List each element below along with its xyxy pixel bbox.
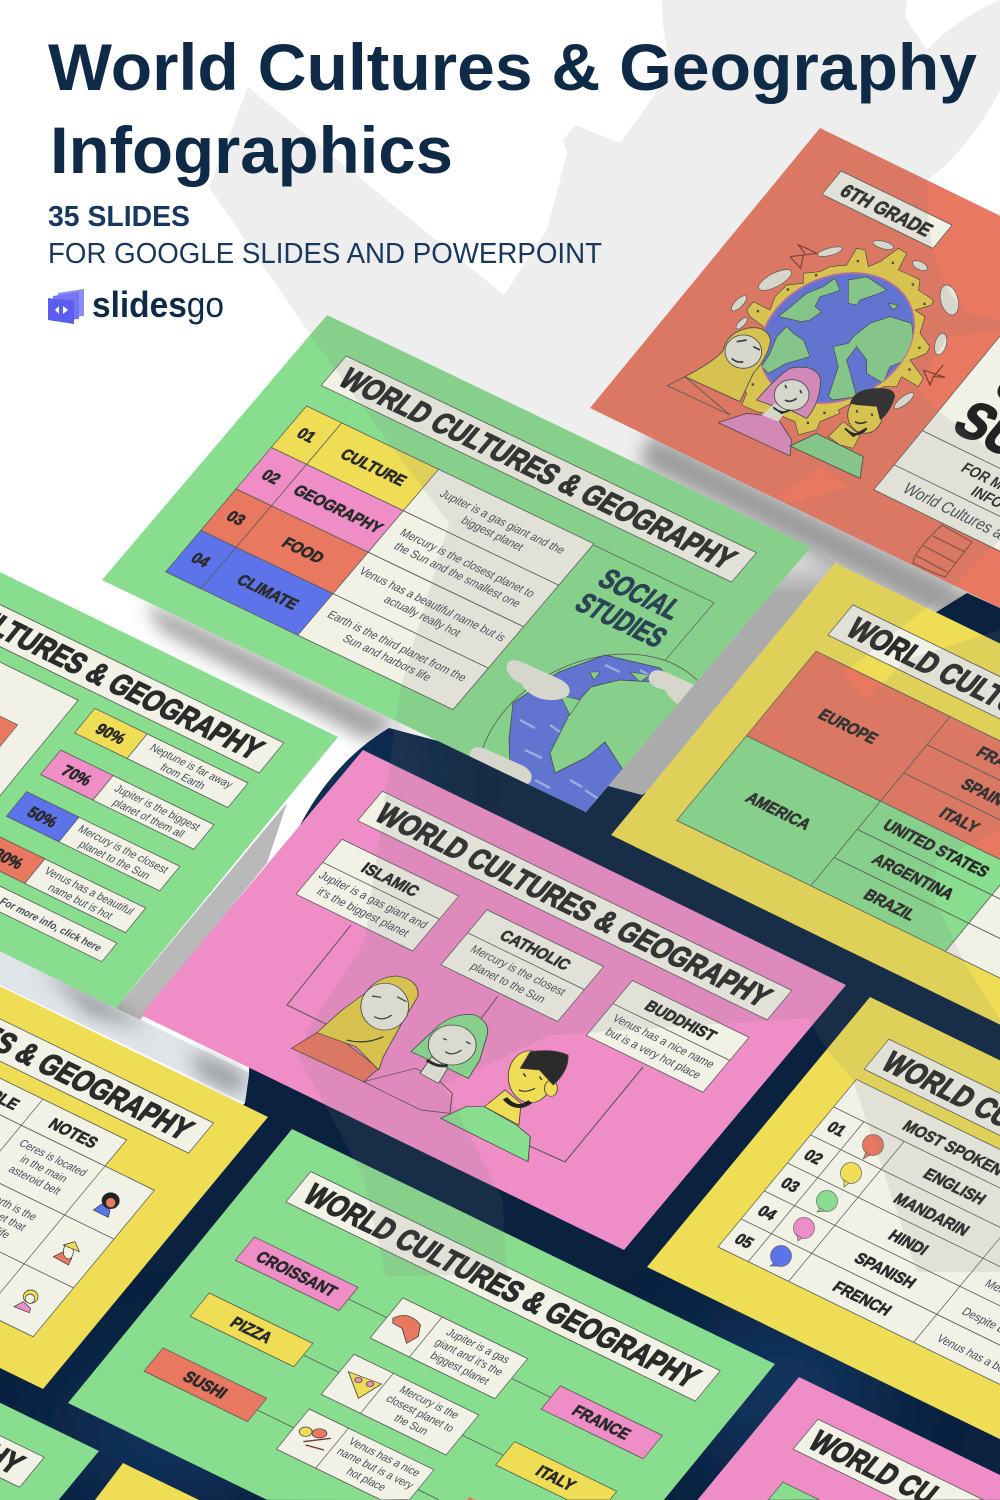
slide: yellow bottom — [95, 1463, 199, 1500]
row 03 food: actually really hot — [381, 594, 464, 640]
slide title: WORLD CULTURES & GEOGRAPHY — [332, 363, 743, 576]
row 01 culture: biggest planet — [458, 515, 527, 554]
card: sushi: Venus has a nice — [346, 1436, 423, 1479]
row 01 culture: 01 — [293, 425, 319, 446]
outlined social studies box: STUDIES — [568, 588, 673, 654]
cover info card — [873, 336, 1000, 552]
slide: europe and america table — [611, 563, 1000, 1071]
translucent silhouette overlay — [209, 0, 1000, 1276]
card: pizza: Mercury is the — [396, 1384, 461, 1422]
row 02 geography: 02 — [257, 467, 284, 488]
grade label — [822, 171, 952, 248]
card: islamic: ISLAMIC — [357, 860, 423, 900]
slide: islamic, catholic and buddhist — [141, 750, 846, 1250]
connectors — [257, 1299, 551, 1500]
card: buddhist: Venus has a nice name — [609, 1013, 717, 1071]
cream column — [945, 782, 1000, 1019]
shadow band beside the pink slide — [116, 803, 287, 1020]
person: woman with pink hair — [718, 367, 821, 456]
table: Ceres is located — [16, 1138, 89, 1179]
label: sushi — [144, 1348, 267, 1422]
america block: UNITED STATES — [879, 817, 993, 881]
language table: 05 — [731, 1231, 757, 1252]
slide: green lower left — [0, 1215, 99, 1500]
label: pizza: PIZZA — [226, 1314, 276, 1347]
subtitle: slide count: 35 SLIDES — [48, 201, 190, 233]
card: buddhist: BUDDHIST — [641, 998, 720, 1045]
row 03 food: FOOD — [278, 535, 327, 567]
globe — [760, 272, 915, 404]
card: pizza: the Sun — [391, 1413, 430, 1438]
card: sushi: name but is a very — [334, 1446, 416, 1492]
america block: BRAZIL — [860, 887, 919, 924]
language table: HINDI — [884, 1227, 931, 1259]
row 50% — [6, 792, 180, 891]
row 02 geography: the Sun and the smallest one — [391, 541, 523, 610]
card: sushi — [276, 1409, 434, 1500]
row 03 food: 03 — [222, 508, 249, 529]
row 30%: Venus has a beautiful — [41, 865, 136, 918]
row 90%: Neptune is far away — [147, 742, 236, 791]
row 04 climate: Sun and harbors life — [340, 633, 434, 684]
clouds and planes — [667, 239, 962, 478]
more info row — [0, 868, 117, 962]
illustration: connector lines and three people — [287, 925, 643, 1162]
language table: 02 — [800, 1147, 826, 1168]
card: croissant: giant and it's the — [432, 1337, 506, 1379]
card: islamic: it's the biggest planet — [314, 886, 412, 940]
main title: World Cultures & Geography — [48, 30, 977, 104]
row 01 culture — [271, 406, 594, 585]
europe block: ITALY — [935, 805, 983, 837]
label: sushi: SUSHI — [179, 1369, 230, 1402]
card: croissant: Jupiter is a gas — [443, 1327, 513, 1366]
table — [0, 1060, 176, 1337]
row 70%: Jupiter is the biggest — [111, 783, 203, 833]
soft drop shadows — [40, 432, 1000, 1095]
row 03 food — [201, 489, 523, 668]
row 70%: 70% — [57, 763, 95, 790]
row 04 climate: Earth is the third planet from the — [324, 609, 469, 684]
label: italy: ITALY — [532, 1463, 579, 1495]
card: islamic — [296, 839, 459, 951]
navy backdrop highlights — [70, 720, 880, 1490]
slide: percentages — [0, 501, 338, 1008]
america block: ARGENTINA — [868, 851, 957, 903]
card: buddhist: but is a very hot place — [602, 1027, 703, 1082]
row 70%: planet of them all — [110, 797, 187, 840]
pale gap behind lower left slides — [0, 950, 250, 1103]
icons: people portraits — [14, 1193, 119, 1313]
card: catholic — [441, 910, 604, 1022]
shadow band between slides — [586, 547, 835, 835]
slide: 6th grade cover — [590, 128, 1000, 644]
label: france: FRANCE — [568, 1403, 634, 1443]
chart panel — [0, 580, 78, 882]
language table: 03 — [777, 1175, 803, 1196]
card: catholic: Mercury is the closest — [467, 944, 569, 999]
row 01 culture: Jupiter is a gas giant and the — [437, 488, 567, 557]
card: catholic: planet to the Sun — [467, 961, 548, 1006]
card: pizza: closest planet to — [383, 1393, 457, 1435]
language table — [718, 1079, 1000, 1446]
person: woman with green hair — [364, 1014, 488, 1113]
person: woman in hijab — [292, 976, 418, 1082]
card: pizza — [321, 1354, 479, 1455]
outlined social studies box: SOCIAL — [591, 564, 689, 626]
europe block: EUROPE — [814, 706, 881, 748]
slide: people table — [0, 881, 268, 1389]
row 70% — [41, 750, 214, 849]
slide title — [0, 1257, 44, 1487]
outlined social studies box — [453, 545, 714, 768]
row 90% — [75, 708, 248, 808]
slide: most spoken languages — [647, 997, 1000, 1500]
icon: stacked slides — [48, 289, 84, 324]
grade label: 6TH GRADE — [836, 180, 938, 240]
main title: Infographics — [50, 113, 453, 187]
icons: speech bubbles — [770, 1134, 884, 1266]
language table: MANDARIN — [890, 1191, 972, 1239]
row 01 culture: CULTURE — [336, 446, 410, 490]
row 30% — [0, 833, 146, 933]
person: man with dark hair — [790, 388, 895, 478]
card: croissant — [370, 1298, 528, 1399]
language table: FRENCH — [829, 1279, 895, 1319]
language table: 01 — [823, 1119, 849, 1140]
card: catholic: CATHOLIC — [496, 928, 574, 974]
card: buddhist — [586, 981, 749, 1092]
icons: croissant, pizza and sushi — [299, 1315, 420, 1450]
table: NOTES — [44, 1116, 101, 1152]
table: in the main — [17, 1154, 70, 1185]
label: japan, mostly below the frame — [467, 1497, 475, 1500]
label: pizza — [190, 1293, 313, 1367]
row 02 geography: Mercury is the closest planet to — [397, 527, 537, 600]
icon: striped book outline — [913, 525, 972, 577]
navy backdrop — [0, 593, 1000, 1500]
slide: pink lower right — [697, 1377, 1000, 1500]
card: croissant: biggest planet — [427, 1350, 492, 1387]
card: sushi: hot place — [343, 1466, 388, 1494]
row 03 food: Venus has a beautiful name but is — [356, 566, 508, 644]
illustration: globe with clouds — [470, 654, 698, 812]
label: france — [541, 1386, 662, 1459]
green content box — [768, 1482, 820, 1500]
language table: ENGLISH — [919, 1166, 989, 1208]
language table: SPANISH — [850, 1250, 919, 1292]
row 04 climate: CLIMATE — [233, 572, 302, 613]
label: croissant — [235, 1237, 358, 1311]
america block — [677, 736, 1000, 951]
slide: food and countries — [68, 1129, 775, 1500]
row 02 geography — [236, 447, 559, 627]
slide title: WORLD CULTURES & GEOGRAPHY — [368, 798, 779, 1013]
slide: culture, geography, food and climate table — [102, 315, 811, 812]
label: croissant: CROISSANT — [252, 1249, 341, 1301]
subtitle: compatibility: FOR GOOGLE SLIDES AND POWERPOINT — [48, 238, 602, 270]
row 90%: 90% — [91, 721, 129, 748]
illustration: globe, city ring and people — [667, 239, 972, 577]
table: asteroid belt — [6, 1164, 63, 1198]
america block: AMERICA — [742, 790, 814, 834]
row 30%: name but is hot — [45, 882, 115, 922]
person: man with dark hair — [441, 1051, 568, 1162]
row 90%: from Earth — [157, 762, 208, 792]
label: italy — [496, 1442, 617, 1500]
logo: slidesgo — [48, 284, 224, 325]
card: islamic: Jupiter is a gas giant and — [316, 870, 430, 931]
slide title: WORLD CULTURES & GEOGRAPHY — [297, 1179, 706, 1395]
row 50%: Mercury is the closest — [75, 823, 171, 876]
row 04 climate — [166, 530, 488, 710]
row 02 geography: GEOGRAPHY — [289, 482, 387, 537]
language table: 04 — [754, 1203, 780, 1224]
wordmark: slidesgo — [92, 284, 224, 325]
row 50%: 50% — [23, 804, 61, 831]
row 50%: planet to the Sun — [76, 839, 153, 882]
city skyline ring — [740, 248, 933, 435]
person: woman in hijab — [667, 328, 771, 415]
row 04 climate: 04 — [187, 550, 214, 571]
europe block — [746, 651, 1000, 867]
main title — [48, 30, 977, 187]
